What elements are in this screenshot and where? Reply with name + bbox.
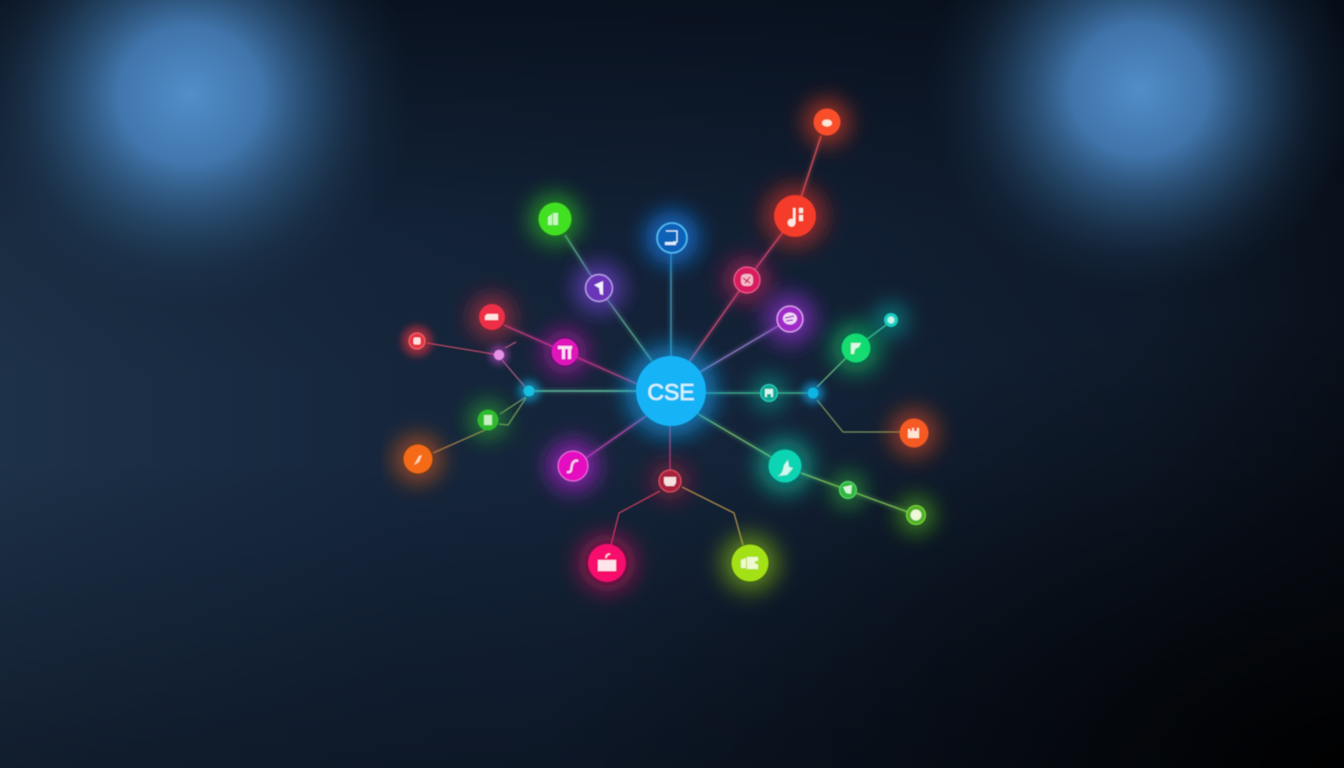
node: orange far left: [394, 435, 442, 483]
node: small teal far right: [875, 304, 907, 336]
node: orange right: [890, 409, 938, 457]
node: violet right: [765, 294, 815, 344]
node: large red: [764, 185, 826, 247]
node: green right: [831, 323, 881, 373]
node: teal lower right: [757, 438, 813, 494]
right spotlight: [925, 0, 1344, 295]
node: teal on horizontal spoke: [752, 376, 786, 410]
node: magenta bottom left: [547, 440, 599, 492]
left spotlight: [0, 0, 415, 310]
center hub: CSE: [625, 345, 717, 437]
node: purple upper left: [574, 263, 624, 313]
connection lines glow: [504, 136, 916, 515]
node: green lower left: [469, 401, 507, 439]
node: green top left: [530, 194, 580, 244]
node: small green right: [831, 473, 865, 507]
node: hot pink bottom: [578, 534, 636, 592]
node: small pink: [490, 346, 508, 364]
node: lime far right: [898, 497, 934, 533]
node: small red far left: [402, 326, 432, 356]
center hub: CSE: CSE: [647, 379, 695, 405]
node: cyan junction right: [802, 382, 824, 404]
node: blue top: [645, 211, 699, 265]
connection lines: [427, 136, 916, 545]
network diagram: [394, 99, 938, 592]
node: crimson: [724, 257, 770, 303]
node: orange-red top: [804, 99, 850, 145]
node: cyan junction left: [518, 380, 540, 402]
node: dark red bottom center: [651, 462, 689, 500]
node: red left: [470, 295, 514, 339]
node: magenta left: [542, 329, 588, 375]
node: lime bottom: [721, 534, 779, 592]
